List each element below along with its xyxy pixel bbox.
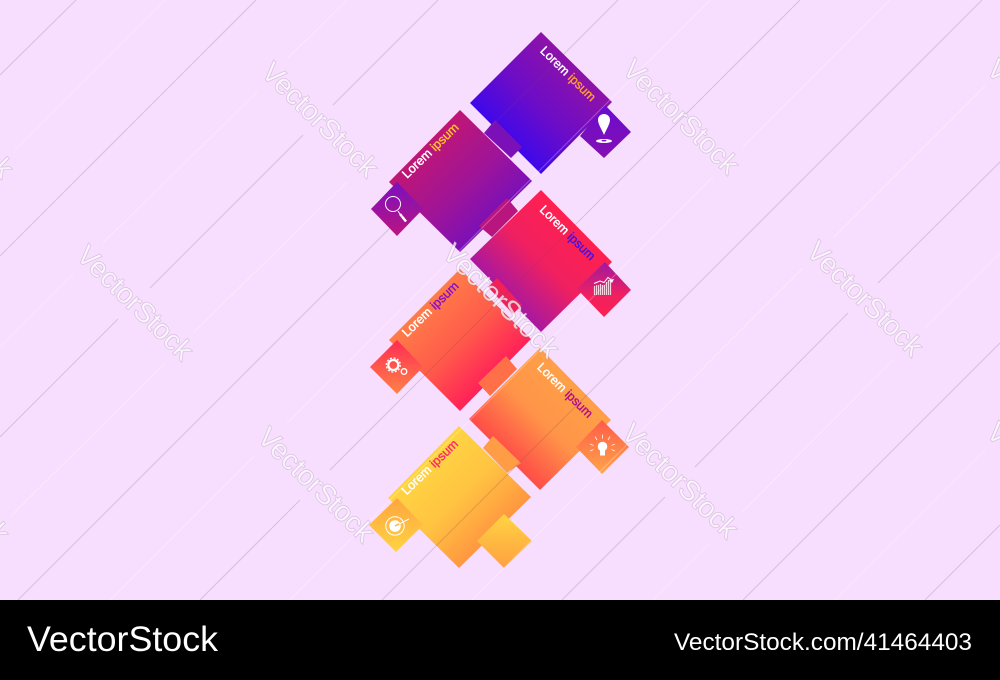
icon tile: target	[369, 498, 423, 552]
label: step 5: Lorem ipsum	[534, 360, 596, 421]
panel: crimson step 3	[470, 190, 612, 332]
icon tile: magnifier	[371, 182, 423, 236]
panel: orange step 5	[469, 348, 611, 490]
watermark: VectorStock	[437, 237, 566, 365]
footer bar	[0, 600, 1000, 680]
panel: red-orange step 4	[389, 269, 531, 411]
watermark: VectorStock	[71, 239, 200, 367]
connector tile: orange-red	[478, 356, 517, 396]
label: step 2: Lorem ipsum	[399, 120, 462, 181]
connector tile: bottom yellow	[477, 514, 532, 568]
watermark: VectorStock	[252, 421, 381, 549]
panel: yellow step 6	[388, 426, 531, 568]
footer image id: VectorStock.com/41464403	[674, 629, 972, 656]
connector tile: violet	[484, 120, 522, 158]
footer brand: VectorStock	[27, 619, 218, 659]
watermark: VectorStock	[801, 235, 930, 363]
watermark: VectorStock	[617, 53, 746, 181]
connector tile: magenta	[479, 198, 518, 237]
icon tile: gears	[370, 340, 423, 394]
label: step 6: Lorem ipsum	[399, 437, 461, 498]
icon tile: light bulb	[576, 420, 629, 474]
label: step 1: Lorem ipsum	[537, 44, 599, 104]
watermark	[0, 53, 1000, 550]
watermark: VectorStock	[616, 417, 745, 545]
icon tile: growth chart	[577, 262, 631, 317]
connector tile: red	[488, 278, 522, 314]
label: step 4: Lorem ipsum	[399, 279, 462, 340]
connector tile: orange	[483, 436, 521, 473]
panel: violet step 1	[470, 32, 612, 174]
panel: magenta step 2	[389, 110, 532, 252]
watermark: VectorStock	[256, 56, 385, 184]
label: step 3: Lorem ipsum	[537, 203, 598, 263]
icon tile: map pin	[580, 105, 631, 158]
